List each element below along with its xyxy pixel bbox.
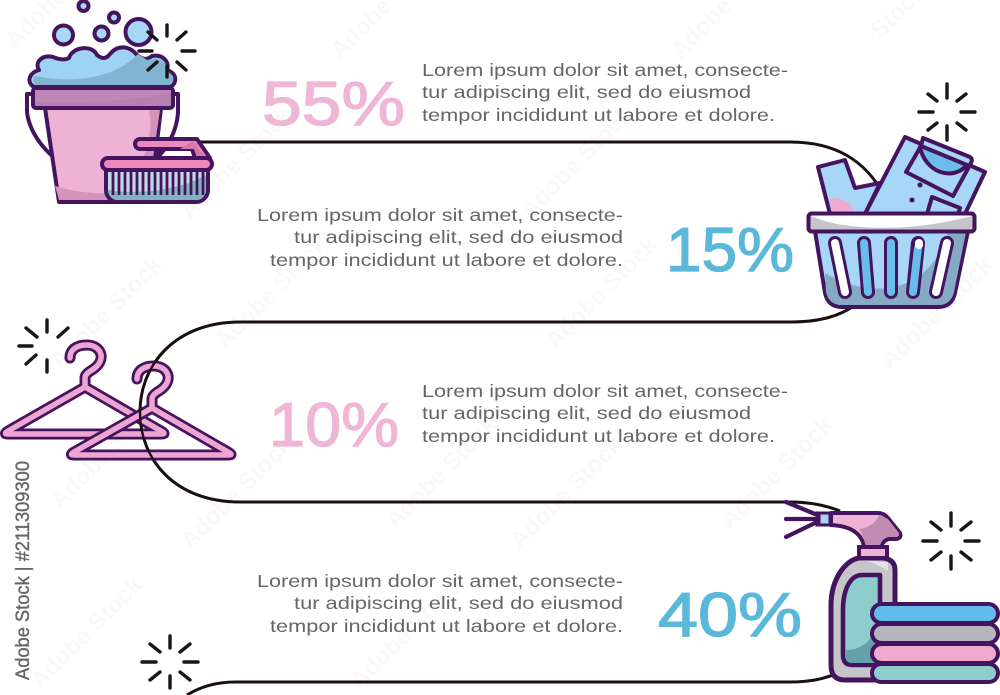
shirt pocket	[927, 197, 960, 214]
watermark pattern: Adobe Stock	[45, 251, 168, 374]
text block 3: tempor incididunt ut labore et dolore.	[422, 426, 775, 446]
spark	[19, 320, 68, 372]
bottle label	[843, 575, 880, 665]
watermark pattern: Adobe Stock	[345, 571, 468, 694]
sprayer head	[831, 513, 900, 547]
spark: bottom left	[142, 636, 198, 688]
watermark pattern: Adobe Stock	[540, 231, 663, 354]
bucket rim	[33, 88, 173, 108]
basket slots	[835, 243, 947, 292]
spray lines	[786, 502, 815, 537]
hanger 1	[6, 345, 164, 434]
watermark pattern: Adobe Stock	[380, 411, 503, 534]
bucket body	[45, 108, 161, 202]
watermark pattern: Adobe Stock	[515, 101, 638, 224]
icon: laundry basket	[808, 84, 985, 307]
percentage: 40%: 40%	[658, 581, 802, 650]
text block 3: Lorem ipsum dolor sit amet, consecte-	[422, 381, 788, 401]
bubbles	[54, 1, 152, 45]
t-shirt	[818, 160, 880, 214]
brush bristles	[106, 170, 208, 202]
percentage: 15%: 15%	[666, 216, 794, 285]
spark	[923, 513, 979, 569]
text block 1	[422, 60, 788, 125]
nozzle	[816, 512, 832, 526]
spark	[919, 84, 975, 140]
text block 2: tempor incididunt ut labore et dolore.	[270, 250, 623, 270]
text block 2: tur adipiscing elit, sed do eiusmod	[294, 227, 623, 247]
text block 1: Lorem ipsum dolor sit amet, consecte-	[422, 60, 788, 80]
text block 2	[257, 205, 623, 270]
stock credit vertical text: Adobe Stock | #211309300	[12, 461, 34, 680]
hanger 2	[72, 366, 231, 455]
watermark pattern: Adobe Stock	[25, 571, 148, 694]
foam	[29, 47, 175, 87]
shirt	[865, 137, 985, 214]
line passing over hanger	[138, 360, 158, 460]
text block 3	[422, 381, 788, 446]
text block 2: Lorem ipsum dolor sit amet, consecte-	[257, 205, 623, 225]
percentage: 55%: 55%	[262, 70, 405, 139]
basket rim	[808, 214, 974, 232]
text block 3: tur adipiscing elit, sed do eiusmod	[422, 403, 751, 423]
watermark pattern: Adobe Stock	[175, 431, 298, 554]
icon: spray bottle and towels	[786, 502, 998, 682]
towels	[872, 604, 998, 682]
bottle body	[831, 558, 895, 680]
text block 4	[257, 571, 623, 636]
shirt collar	[906, 138, 972, 196]
text block 4: tempor incididunt ut labore et dolore.	[270, 616, 623, 636]
watermark pattern: Adobe Stock	[210, 231, 333, 354]
percentage: 10%: 10%	[269, 391, 399, 460]
icon: hangers	[0, 318, 236, 460]
watermark pattern: Adobe Stock	[875, 251, 998, 374]
bucket handle	[27, 94, 104, 178]
watermark pattern: Adobe Stock	[505, 431, 628, 554]
spark	[139, 25, 195, 77]
text block 1: tempor incididunt ut labore et dolore.	[422, 105, 775, 125]
text block 4: tur adipiscing elit, sed do eiusmod	[294, 593, 623, 613]
connecting timeline path	[140, 142, 884, 695]
basket body	[815, 231, 968, 307]
watermark pattern: Adobe Stock	[175, 101, 298, 224]
watermark pattern: Adobe Stock	[45, 391, 168, 514]
bottle neck	[859, 547, 887, 558]
text block 1: tur adipiscing elit, sed do eiusmod	[422, 82, 751, 102]
watermark pattern: Adobe Stock	[715, 411, 838, 534]
text block 4: Lorem ipsum dolor sit amet, consecte-	[257, 571, 623, 591]
icon: bucket and brush	[27, 1, 212, 202]
brush handle	[135, 139, 210, 158]
